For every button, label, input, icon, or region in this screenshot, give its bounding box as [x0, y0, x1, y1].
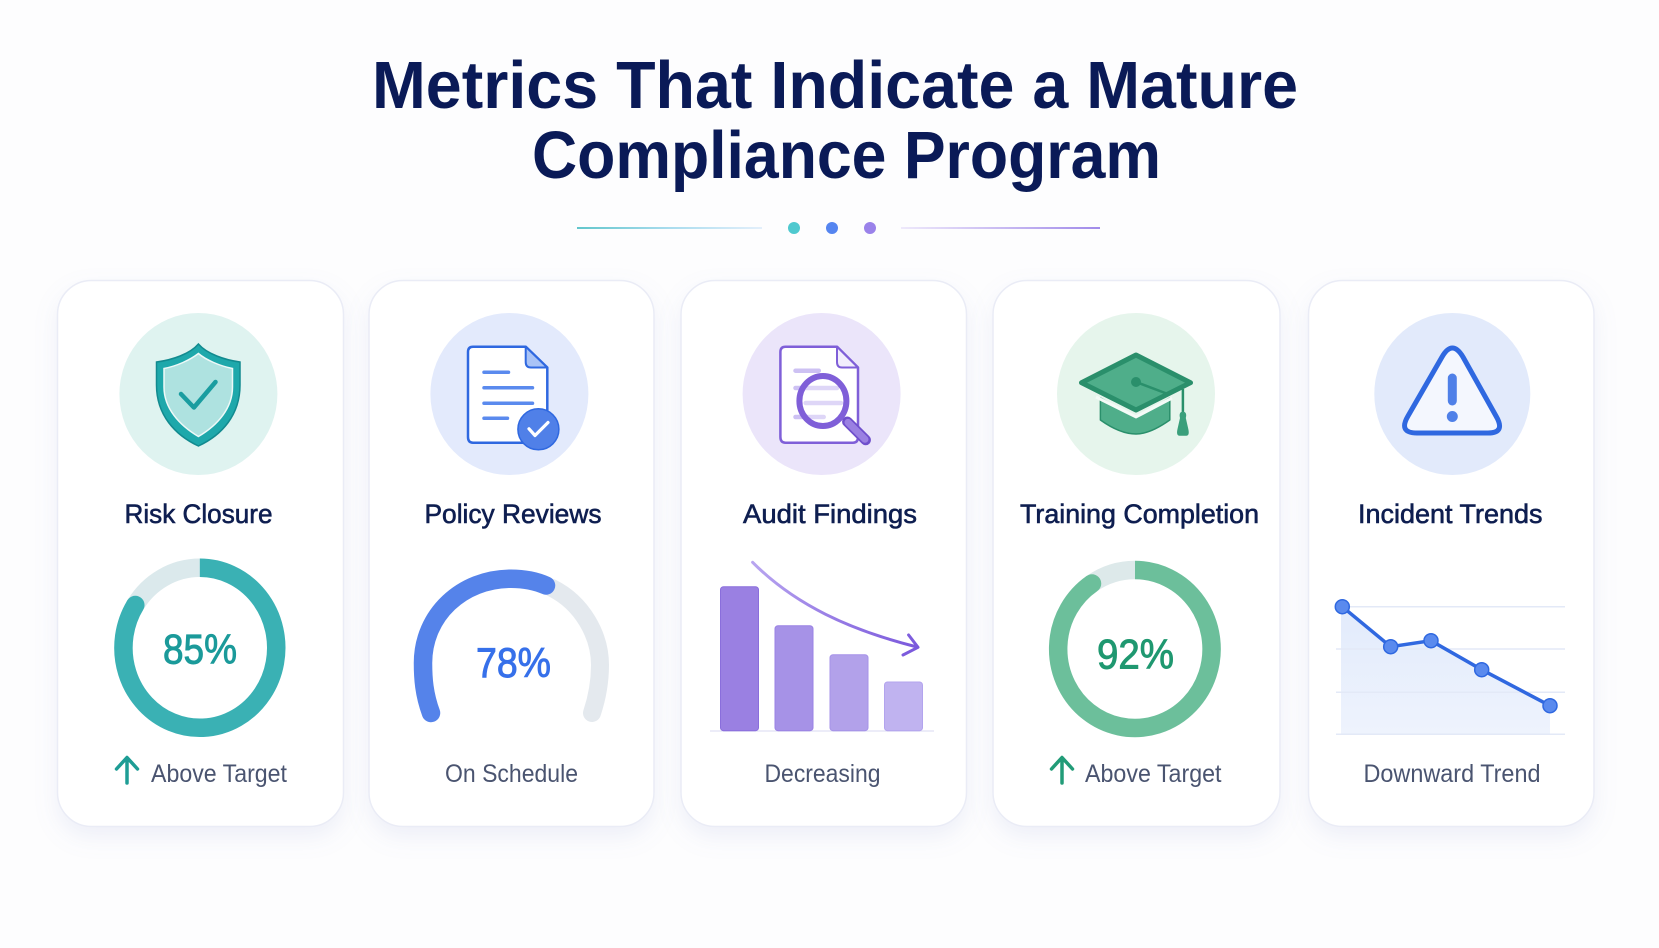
gauge chart: 78%: 78% [476, 639, 551, 686]
icon: document with magnifier [743, 313, 901, 475]
panel: risk closure [58, 280, 344, 826]
status: above target [116, 758, 287, 788]
title [372, 48, 1298, 193]
gauge chart: 78% [423, 579, 600, 713]
status: above target [1052, 758, 1222, 788]
status: above target: Above Target [151, 760, 287, 788]
line chart: downward trend [1335, 600, 1565, 734]
donut chart: 85% [123, 568, 276, 728]
arrow: decreasing trend [753, 562, 918, 655]
icon: shield [119, 313, 277, 475]
icon: warning triangle [1374, 313, 1530, 475]
title: Metrics That Indicate a Mature [372, 48, 1298, 123]
heading: training completion: Training Completion [1020, 499, 1259, 529]
title: Compliance Program [532, 118, 1161, 193]
donut chart: 92% [1058, 570, 1212, 728]
panel: incident trends [1308, 280, 1594, 826]
heading: audit findings: Audit Findings [743, 499, 917, 529]
bar chart: decreasing [710, 562, 934, 731]
title divider [577, 222, 1100, 234]
status: above target: Above Target [1085, 760, 1222, 788]
status: decreasing: Decreasing [764, 760, 880, 788]
donut chart: 92%: 92% [1097, 630, 1174, 678]
heading: policy reviews: Policy Reviews [424, 499, 602, 529]
panel: audit findings [681, 280, 966, 826]
icon: graduation cap [1057, 313, 1215, 475]
status: on schedule: On Schedule [445, 760, 578, 788]
icon: document with check [430, 313, 588, 475]
panel: training completion [993, 280, 1280, 826]
donut chart: 85%: 85% [163, 626, 237, 672]
panel: policy reviews [369, 280, 654, 826]
heading: incident trends: Incident Trends [1358, 499, 1542, 529]
heading: risk closure: Risk Closure [124, 499, 272, 529]
status: downward trend: Downward Trend [1364, 760, 1540, 788]
